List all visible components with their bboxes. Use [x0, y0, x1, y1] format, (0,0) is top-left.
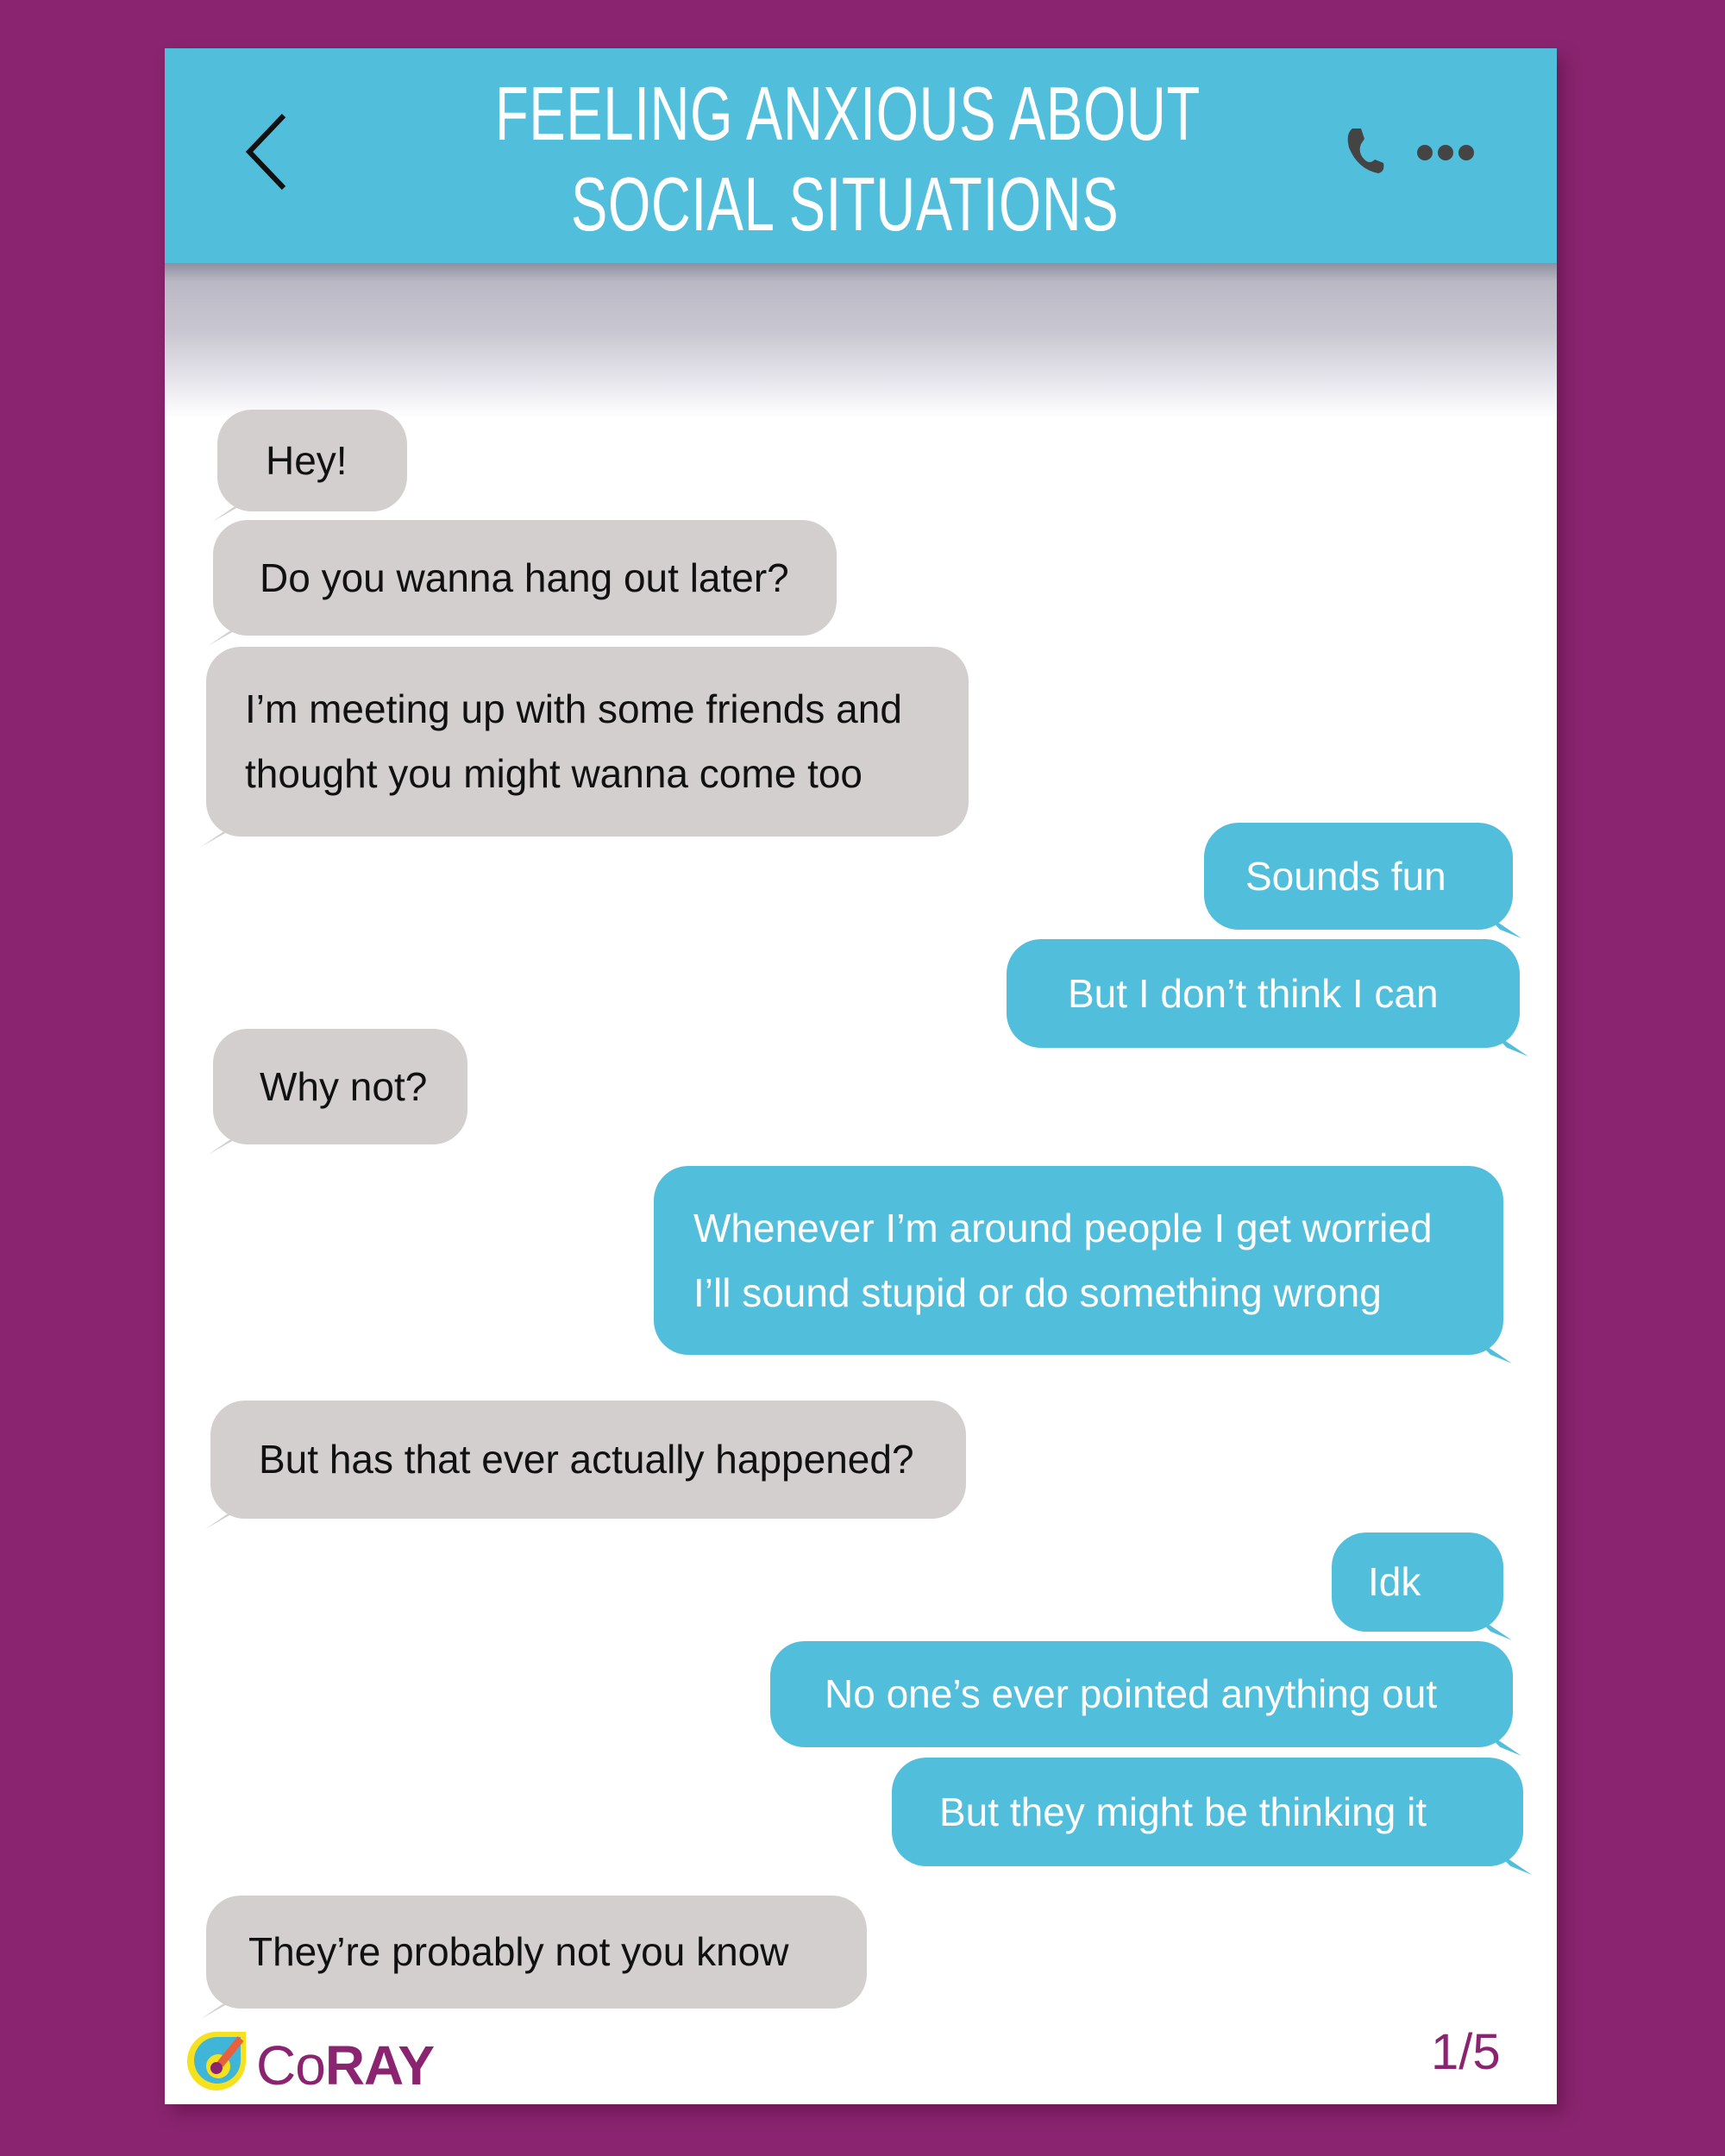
bubble: Hey	[217, 410, 407, 511]
icon: logo mark	[187, 2032, 246, 2090]
bubble: has that happened: But has that ever actually happened?	[259, 1437, 914, 1482]
bubble: whenever	[654, 1166, 1503, 1355]
bubble: might be thinking	[892, 1758, 1523, 1866]
bubble: meeting friends: I’m meeting up with some friends and	[245, 686, 902, 731]
bubble: Idk: Idk	[1368, 1559, 1421, 1604]
header bar	[165, 48, 1557, 263]
bubble: hang out: Do you wanna hang out later?	[260, 555, 789, 600]
bubble: whenever: Whenever I’m around people I get worried	[693, 1206, 1433, 1250]
title: SOCIAL SITUATIONS	[571, 161, 1119, 247]
bubble: meeting friends: thought you might wanna come too	[245, 751, 862, 796]
phone panel	[165, 48, 1557, 2104]
bubble: probably not: They’re probably not you know	[248, 1929, 788, 1974]
page number: 1/5	[1431, 2024, 1501, 2080]
bubble: Hey: Hey!	[266, 438, 348, 483]
icon: phone and dots	[1347, 128, 1474, 173]
bubble: why not: Why not?	[260, 1064, 427, 1109]
bubble: probably not	[206, 1896, 867, 2009]
bubble: no one's pointed out	[770, 1641, 1513, 1747]
bubble: has that happened	[210, 1401, 966, 1519]
bubble: meeting friends	[206, 647, 969, 837]
logo: CoRAY: CoRAY	[256, 2034, 434, 2096]
bubble: don't think I can	[1007, 939, 1520, 1048]
bubble: sounds fun	[1204, 823, 1513, 930]
title	[495, 71, 1201, 247]
logo: CoRAY	[187, 2032, 434, 2096]
icon: back arrow	[245, 114, 286, 190]
title: FEELING ANXIOUS ABOUT	[495, 71, 1201, 156]
bubble: might be thinking: But they might be thinking it	[939, 1789, 1427, 1833]
bubble: sounds fun: Sounds fun	[1245, 854, 1446, 899]
bubble: no one's pointed out: No one’s ever pointed anything out	[825, 1671, 1437, 1716]
bubble: Idk	[1332, 1532, 1503, 1632]
bubble: hang out	[213, 520, 837, 636]
bubble: whenever: I’ll sound stupid or do something wrong	[693, 1269, 1382, 1314]
bubble: don't think I can: But I don’t think I can	[1068, 971, 1439, 1016]
bubble: why not	[213, 1029, 467, 1144]
